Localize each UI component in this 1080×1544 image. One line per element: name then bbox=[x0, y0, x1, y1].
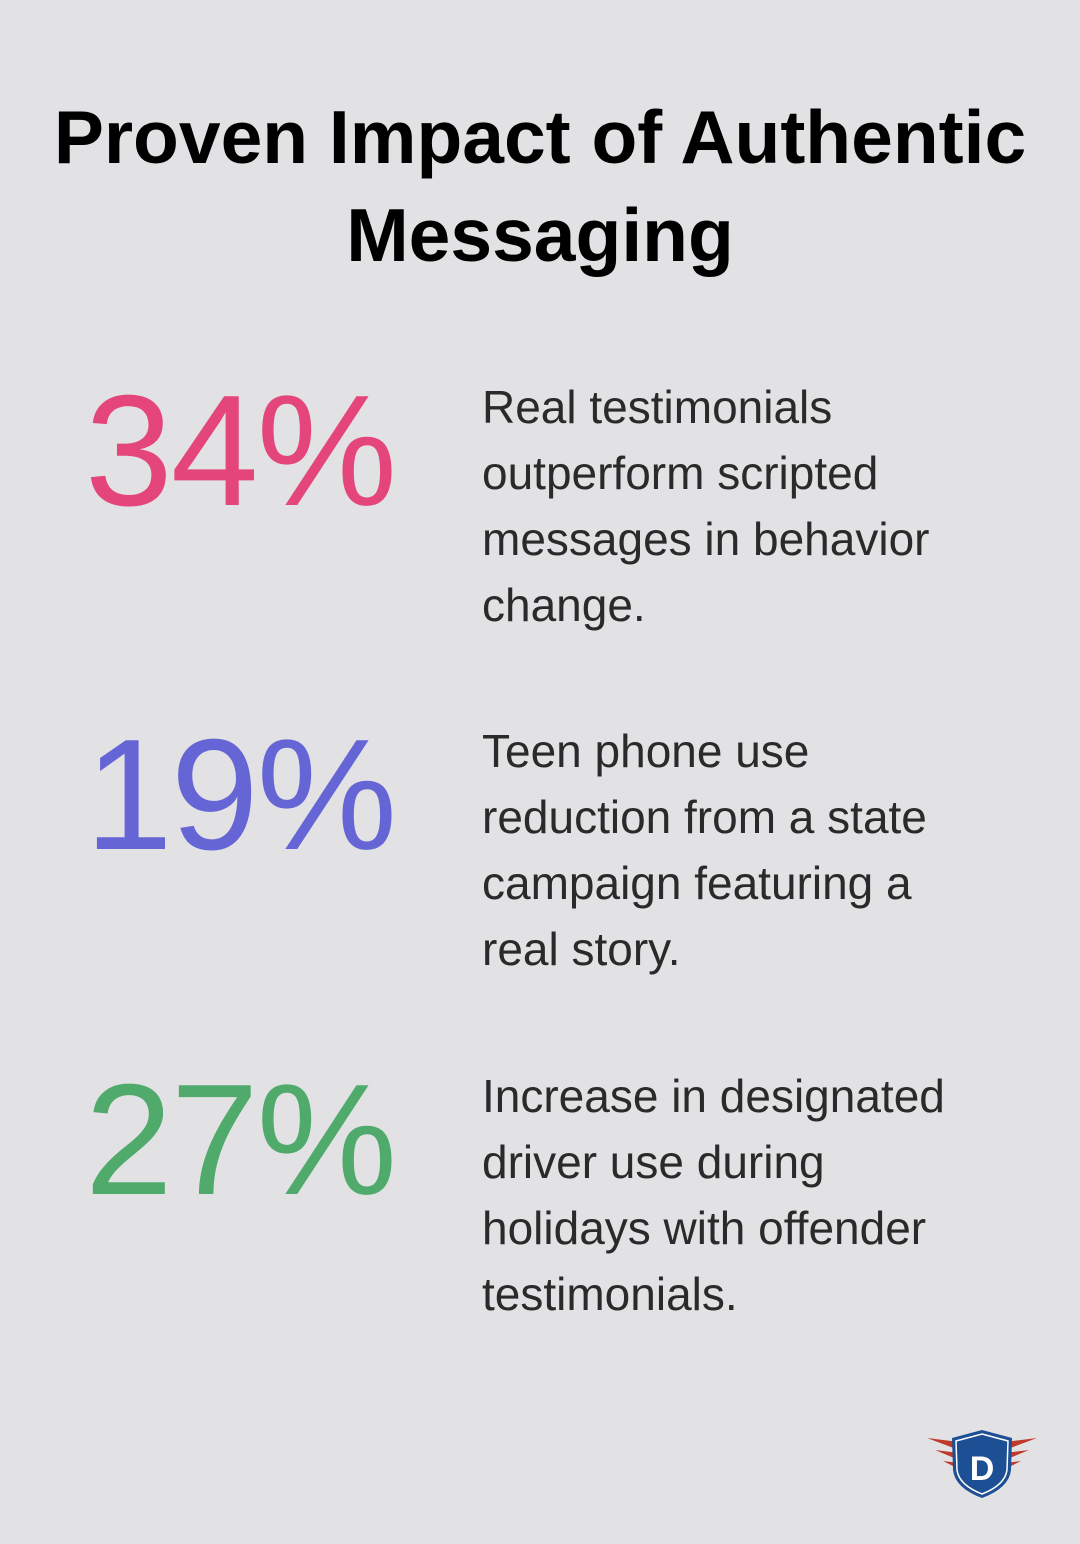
text: 34% description: Real testimonials bbox=[482, 381, 832, 433]
text: 27% description: testimonials. bbox=[482, 1268, 738, 1320]
title: Messaging bbox=[346, 193, 734, 277]
icon: logo shield bbox=[927, 1430, 1037, 1498]
stat: 34%: 34% bbox=[85, 363, 395, 539]
text: 19% description: Teen phone use bbox=[482, 725, 809, 777]
text: 19% description: campaign featuring a bbox=[482, 857, 912, 909]
text: 34% description: messages in behavior bbox=[482, 513, 929, 565]
text: 34% description: outperform scripted bbox=[482, 447, 878, 499]
text: 27% description bbox=[482, 1070, 945, 1320]
text: 27% description: Increase in designated bbox=[482, 1070, 945, 1122]
text: 19% description bbox=[482, 725, 927, 975]
text: 34% description: change. bbox=[482, 579, 646, 631]
text: 19% description: reduction from a state bbox=[482, 791, 927, 843]
stat: 19%: 19% bbox=[85, 707, 395, 883]
text: 27% description: driver use during bbox=[482, 1136, 825, 1188]
title: Proven Impact of Authentic bbox=[54, 95, 1026, 179]
text: 27% description: holidays with offender bbox=[482, 1202, 926, 1254]
text: 34% description bbox=[482, 381, 929, 631]
title bbox=[54, 95, 1026, 277]
icon: logo shield: D bbox=[970, 1450, 994, 1488]
text: 19% description: real story. bbox=[482, 923, 681, 975]
stat: 27%: 27% bbox=[85, 1052, 395, 1228]
